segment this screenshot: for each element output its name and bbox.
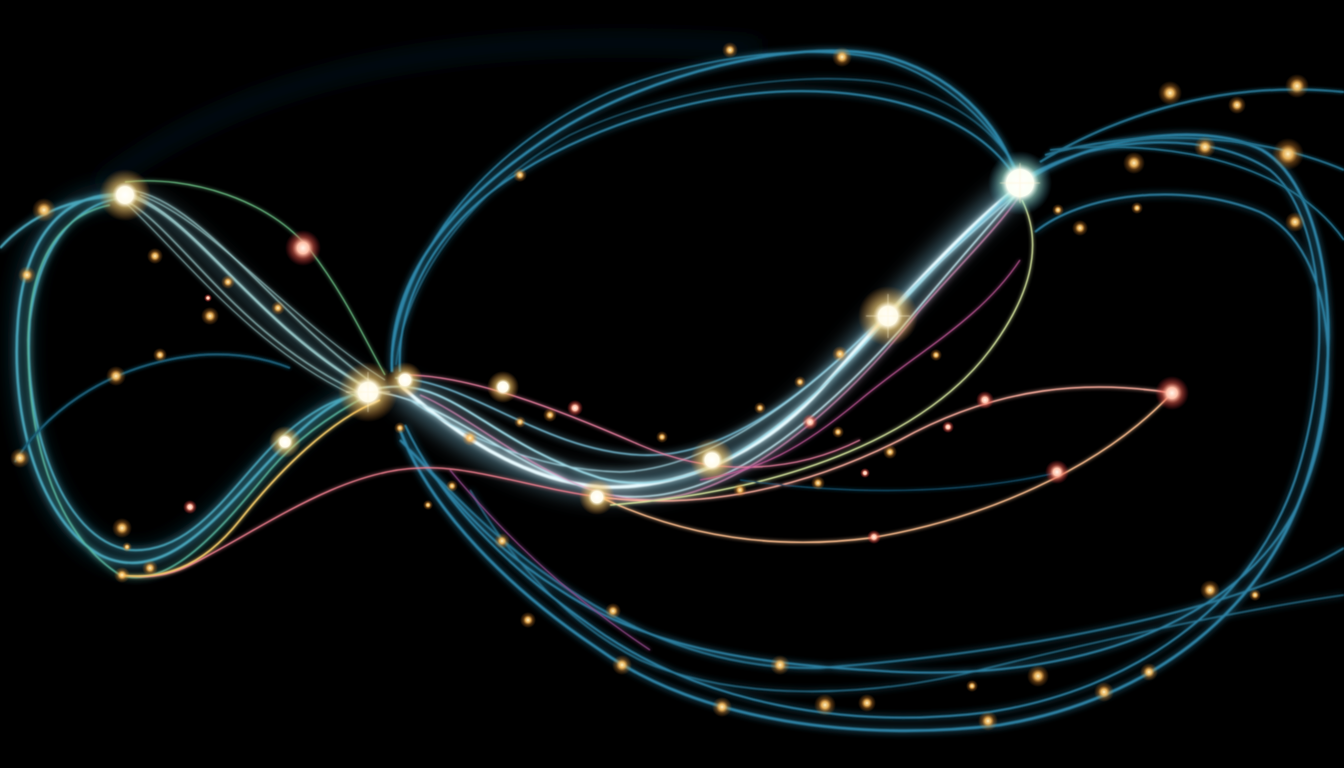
left inner arc: [15, 354, 290, 462]
upper right strands: [1040, 89, 1344, 240]
faint upper arc: [100, 43, 760, 185]
central band halo: [400, 185, 1020, 487]
right and lower sweeping loop strands: [400, 135, 1344, 731]
band halo from upper-left node to centre: [125, 195, 370, 390]
small red particles: [183, 294, 994, 544]
strand band from upper-left node to centre: [120, 190, 385, 398]
large upper ellipse strands: [392, 51, 1022, 372]
left loop strands: [0, 195, 370, 577]
thin green arc to red node: [125, 181, 385, 375]
large bright nodes: [99, 151, 1189, 515]
central bright strand band: [370, 180, 1025, 500]
pink and yellow fine lines: [120, 200, 1172, 650]
star flares on the brightest nodes: [346, 163, 1040, 412]
left loop soft halo: [21, 195, 370, 559]
